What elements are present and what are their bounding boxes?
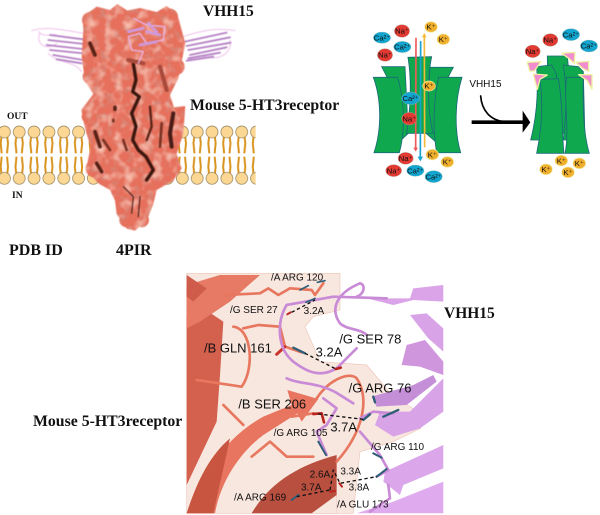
ions above blocked channel: Ca²⁺ [563,30,579,39]
residue labels: /B SER 206 [238,397,306,412]
ions below open channel: Na⁺ [399,154,413,163]
receptor surface [81,4,185,231]
open channel: K⁺ [424,82,434,91]
residue labels: /G ARG 76 [349,380,411,395]
heading: Mouse 5-HT3receptor: Mouse 5-HT3receptor [190,97,339,114]
VHH15 nanobody front [128,18,165,63]
label: Mouse 5-HT3receptor close-up: Mouse 5-HT3receptor [33,413,182,430]
ions below open channel: K⁺ [443,158,452,167]
label: PDB ID: PDB ID [9,242,63,259]
blocked channel [527,52,592,153]
ions above open channel: Na⁺ [378,51,392,60]
ions above open channel [373,22,450,61]
hydrogen bonds [292,300,377,497]
coral side chains [197,283,363,462]
heading: VHH15: VHH15 [203,3,254,20]
open channel: Na⁺ [402,114,416,123]
open channel: Ca²⁺ [402,94,419,103]
residue labels: /B GLN 161 [204,340,272,355]
ions above open channel: Ca²⁺ [374,33,390,42]
purple ribbons [357,285,443,513]
lipid bilayer membrane [0,125,256,187]
VHH15 nanobody left [32,28,93,72]
residue labels: /A GLU 173 [337,499,389,510]
ions below open channel: Ca²⁺ [407,166,424,175]
ions below open channel: Ca²⁺ [425,172,442,181]
residue labels: /A ARG 120 [271,273,324,284]
ions above blocked channel: Na⁺ [526,47,540,56]
residue labels: 3.2A [316,344,343,359]
ions below blocked channel [540,155,586,178]
residue labels: /A ARG 169 [234,493,287,504]
residue labels: 3.2A [304,306,325,317]
residue labels: /G ARG 105 [274,428,328,439]
receptor dark grooves [90,43,173,217]
panel: protein structure [0,4,256,231]
ions above blocked channel [525,29,598,58]
ions below blocked channel: K⁺ [575,159,584,168]
label: IN: IN [12,191,23,201]
ion flow arrows [416,36,425,158]
residue labels: 3.7A [301,483,322,494]
residue labels: /G SER 78 [339,331,401,346]
label: VHH15: VHH15 [469,79,502,90]
ions below blocked channel: K⁺ [557,156,566,165]
residue labels: 3.8A [349,483,370,494]
residue labels: 3.7A [330,420,357,435]
ions below open channel: K⁺ [428,150,437,159]
panel: channel diagram [373,22,598,183]
ions above open channel: K⁺ [439,35,448,44]
ions below blocked channel: K⁺ [563,168,573,177]
ions above open channel: K⁺ [426,23,436,32]
ions below blocked channel: K⁺ [541,165,551,174]
ions above blocked channel: Ca²⁺ [581,42,597,51]
VHH15 bound wedges [527,52,592,89]
label: VHH15 close-up: VHH15 [444,305,495,322]
molecular surface [187,273,421,513]
ions below open channel: Na⁺ [387,166,401,175]
label: 4PIR: 4PIR [116,242,152,259]
panel: binding interface close-up [187,273,443,513]
teal and red atom tips [287,281,398,500]
arrow: inhibition [472,96,530,133]
purple loops [280,283,393,512]
ions above open channel: Ca²⁺ [394,43,411,52]
label: OUT: OUT [7,112,28,122]
ions above blocked channel: Na⁺ [543,36,557,45]
VHH15 nanobody right [183,29,235,61]
residue labels: 3.3A [340,466,361,477]
ions below open channel [386,149,454,183]
coral ribbons [187,275,337,513]
residue labels: /G ARG 110 [371,442,425,453]
ions above open channel: Na⁺ [395,27,409,36]
residue labels: /G SER 27 [230,305,278,316]
ions inside [423,81,435,91]
residue labels: 2.6A [310,469,331,480]
open channel [373,33,462,161]
residue labels [204,273,425,510]
